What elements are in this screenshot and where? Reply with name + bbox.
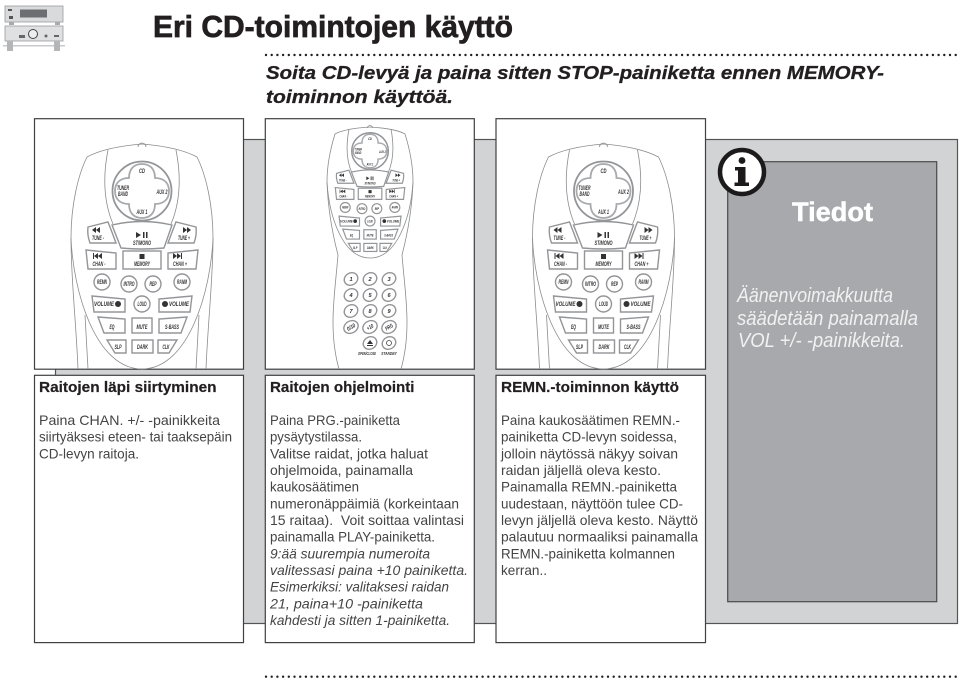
text panel: REMN.-toiminnon käyttö	[496, 375, 706, 643]
subtitle: Soita CD-levyä ja paina sitten STOP-painiketta ennen MEMORY-	[266, 62, 884, 83]
remote control with keypad: TUNER	[355, 147, 362, 151]
body text: 21, paina+10 -painiketta	[269, 595, 423, 611]
body text: painiketta CD-levyn soidessa,	[501, 429, 677, 445]
body text: palautuu normaaliksi painamalla	[501, 529, 698, 545]
remote control: MUTE	[598, 324, 610, 331]
body text	[39, 412, 232, 461]
info text: VOL +/- -painikkeita.	[738, 330, 905, 352]
keypad: +10	[366, 323, 376, 332]
keypad: STANDBY	[381, 351, 397, 356]
info text: Äänenvoimakkuutta	[736, 285, 893, 307]
keypad: 9	[387, 309, 391, 315]
remote control: VOLUME	[630, 301, 651, 308]
remote control: TUNER	[117, 185, 129, 192]
icon: info	[720, 150, 764, 194]
remote control: LOUD	[599, 301, 608, 308]
remote control: SLP	[114, 344, 122, 351]
remote control: TUNE -	[92, 235, 104, 242]
keypad: 0/10	[346, 323, 358, 333]
body text: kahdesti ja sitten 1-painiketta.	[270, 612, 450, 628]
keypad: 2	[367, 277, 372, 283]
remote control with keypad: VOLUME	[387, 219, 400, 223]
background gray panel	[56, 140, 958, 624]
body text: Painamalla REMN.-painiketta	[501, 479, 677, 495]
remote control: VOLUME	[94, 301, 115, 308]
panel: Tiedot	[720, 150, 937, 602]
remote control: S-BASS	[626, 324, 641, 331]
remote control with keypad: EQ	[350, 234, 353, 238]
remote control with keypad: CLK	[383, 246, 387, 250]
remote control: CD	[600, 168, 607, 175]
body text: painamalla PLAY-painiketta.	[270, 529, 435, 545]
body text: Paina CHAN. +/- -painikkeita	[39, 412, 220, 428]
text panel: Raitojen ohjelmointi	[265, 375, 474, 643]
body text	[269, 412, 468, 628]
body text: jolloin näytössä näkyy soivan	[500, 445, 678, 461]
remote control	[532, 143, 674, 369]
remote control: AUX 1	[597, 209, 609, 216]
info text: säädetään painamalla	[737, 308, 918, 330]
remote control with keypad: DARK	[367, 246, 374, 250]
remote control: BAND	[580, 191, 590, 198]
body text: 15 raitaa). Voit soittaa valintasi	[270, 512, 464, 528]
remote control	[71, 143, 213, 369]
remote control: VOLUME	[169, 301, 190, 308]
remote control: REP	[150, 281, 157, 288]
remote control: MEMORY	[134, 261, 151, 268]
body text: 9:ää suurempia numeroita	[270, 545, 430, 561]
remote control: REP	[611, 281, 618, 288]
remote control with keypad: MUTE	[367, 234, 374, 238]
remote control with keypad: AUX 2	[378, 150, 386, 154]
keypad: 7	[349, 309, 353, 315]
body text: kaukosäätimen	[270, 479, 359, 495]
info text	[736, 285, 918, 352]
panel: remote 2	[265, 119, 474, 369]
remote control: CLK	[624, 344, 631, 351]
remote control: AUX 2	[156, 189, 168, 196]
subtitle: toiminnon käyttöä.	[266, 86, 453, 107]
panel: remote 1	[34, 119, 244, 369]
remote control: INTRO	[585, 281, 596, 288]
keypad: OPEN/CLOSE	[358, 351, 377, 356]
remote control with keypad: TUNE -	[339, 178, 347, 182]
remote control with keypad: REMN	[342, 206, 348, 210]
remote control with keypad: INTRO	[359, 207, 365, 211]
heading: REMN.-toiminnon käyttö	[501, 379, 679, 396]
body text: REMN.-painiketta kolmannen	[501, 545, 675, 561]
body text: Esimerkiksi: valitaksesi raidan	[270, 579, 449, 595]
keypad: 8	[368, 309, 372, 315]
remote control: RANM	[177, 279, 187, 286]
body text: raidan jäljellä oleva kesto.	[501, 462, 661, 478]
body text: levyn jäljellä oleva kesto. Näyttö	[501, 512, 698, 528]
body text: Paina PRG.-painiketta	[270, 412, 400, 428]
remote control: LOUD	[138, 301, 147, 308]
remote control: AUX 2	[617, 189, 629, 196]
remote control: DARK	[598, 344, 610, 351]
remote control: INTRO	[124, 281, 135, 288]
body text: pysäytystilassa.	[270, 429, 362, 445]
remote control: TUNE -	[554, 235, 566, 242]
heading: Raitojen ohjelmointi	[270, 379, 414, 396]
remote control with keypad: LOUD	[367, 219, 373, 223]
remote control: CD	[139, 168, 145, 175]
body text: uudestaan, näyttöön tulee CD-	[501, 495, 683, 511]
keypad	[342, 270, 398, 356]
remote control: VOLUME	[556, 301, 576, 308]
remote control: ST/MONO	[133, 240, 151, 247]
text panel: Raitojen läpi siirtyminen	[34, 375, 244, 643]
title: Eri CD-toimintojen käyttö	[153, 10, 513, 44]
subtitle	[266, 62, 884, 107]
body text: CD-levyn raitoja.	[39, 445, 139, 461]
remote control: CHAN -	[554, 261, 567, 268]
remote control with keypad: S-BASS	[384, 234, 393, 238]
remote control: REMN	[558, 279, 569, 286]
remote control: SLP	[576, 344, 583, 351]
remote control: TUNE +	[178, 235, 190, 242]
remote control with keypad: CD	[368, 137, 372, 141]
keypad: 1	[349, 277, 353, 283]
body text	[500, 412, 698, 578]
remote control with keypad: CHAN +	[389, 195, 398, 199]
panel: remote 3	[496, 119, 706, 369]
remote control: MEMORY	[596, 261, 612, 268]
remote control with keypad: TUNE +	[392, 178, 400, 182]
keypad: 5	[368, 293, 372, 299]
remote control: CHAN +	[634, 261, 649, 268]
keypad: 3	[387, 277, 391, 283]
remote control with keypad: REP	[375, 207, 379, 211]
remote control: EQ	[571, 324, 576, 331]
remote control: DARK	[137, 344, 148, 351]
remote control: TUNER	[578, 185, 591, 192]
remote control: REMN	[97, 279, 107, 286]
body text: ohjelmoida, painamalla	[270, 462, 413, 478]
heading: Tiedot: Tiedot	[792, 197, 873, 227]
remote control: BAND	[118, 191, 128, 198]
body text: Valitse raidat, jotka haluat	[270, 445, 428, 461]
remote control: MUTE	[136, 324, 148, 331]
remote control with keypad	[327, 126, 413, 369]
remote control: CHAN -	[92, 261, 106, 268]
remote control: TUNE +	[640, 235, 652, 242]
remote control with keypad: CHAN -	[339, 195, 348, 199]
dotted rule bottom	[266, 676, 960, 678]
remote control: AUX 1	[136, 209, 148, 216]
remote control: RANM	[638, 279, 649, 286]
body text: kerran..	[501, 562, 547, 578]
remote control: S-BASS	[165, 324, 180, 331]
remote control with keypad: VOLUME	[340, 219, 353, 223]
body text: numeronäppäimiä (korkeintaan	[270, 495, 459, 511]
remote control with keypad: ST/MONO	[364, 181, 376, 185]
body text: valitessasi paina +10 painiketta.	[270, 562, 468, 578]
keypad: 6	[387, 293, 391, 299]
remote control with keypad: AUX 1	[366, 162, 373, 166]
icon: stereo system	[3, 6, 65, 51]
keypad: PRG	[385, 323, 395, 332]
body text: siirtyäksesi eteen- tai taaksepäin	[39, 429, 232, 445]
remote control: ST/MONO	[594, 240, 613, 247]
dotted rule top	[266, 54, 960, 56]
remote control with keypad: MEMORY	[365, 195, 375, 199]
remote control: CHAN +	[173, 261, 187, 268]
heading: Raitojen läpi siirtyminen	[39, 379, 216, 396]
body text: Paina kaukosäätimen REMN.-	[501, 412, 680, 428]
remote control with keypad: BAND	[355, 151, 361, 155]
remote control: CLK	[162, 344, 170, 351]
remote control with keypad: RANM	[392, 206, 398, 210]
remote control: EQ	[110, 324, 115, 331]
remote control with keypad: SLP	[353, 246, 358, 250]
keypad: 4	[348, 293, 353, 299]
